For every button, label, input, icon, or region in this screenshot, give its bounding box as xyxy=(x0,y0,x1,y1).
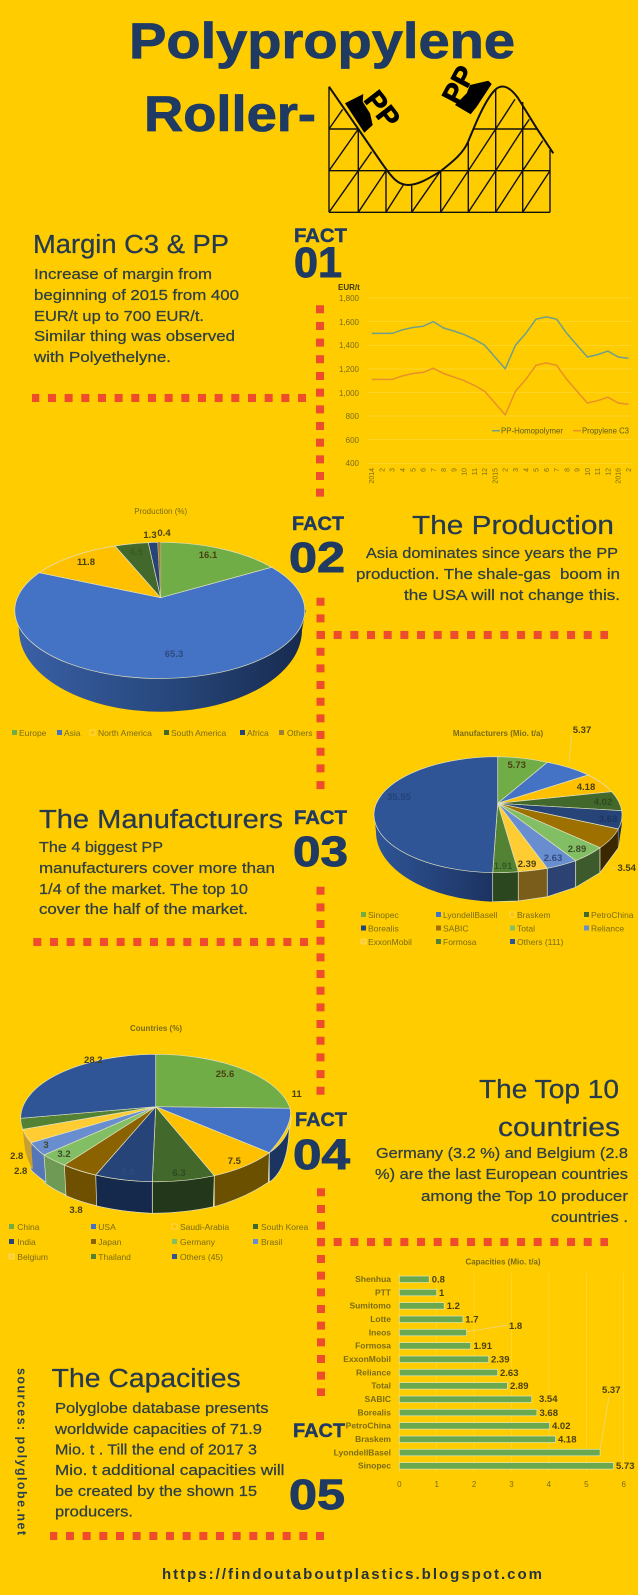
chart legend: production: Europe xyxy=(19,728,47,738)
text block: manufacturers: cover the half of the market. xyxy=(39,901,248,918)
line chart: margin: 9 xyxy=(575,468,582,472)
bar chart: capacities: 3.68 xyxy=(540,1408,558,1419)
chart legend: countries xyxy=(9,1222,309,1262)
chart legend: margin: PP-Homopolymer xyxy=(501,426,563,436)
bar chart: capacities: LyondellBasel xyxy=(334,1447,391,1457)
text block: production: Asia dominates since years the PP xyxy=(366,545,618,562)
bar chart: capacities: 4.02 xyxy=(552,1421,570,1432)
line chart: margin: 10 xyxy=(462,468,469,476)
pie chart: manufacturers: 1.91 xyxy=(494,861,513,872)
chart legend: manufacturers: Borealis xyxy=(368,924,399,934)
text block: margin: Increase of margin from xyxy=(34,266,212,283)
pie chart: manufacturers: 35.55 xyxy=(387,792,412,803)
bar chart: capacities: SABIC xyxy=(365,1394,391,1404)
decorative dashes xyxy=(32,305,608,1536)
line chart: margin: 400 xyxy=(346,459,360,468)
pie chart: countries: 25.6 xyxy=(216,1069,234,1080)
chart legend: manufacturers: ExxonMobil xyxy=(368,937,412,947)
bar chart: capacities: Ineos xyxy=(369,1327,391,1337)
text block: top 10 xyxy=(375,1145,628,1226)
line chart: margin: 10 xyxy=(585,468,592,476)
bar chart: capacities xyxy=(334,1258,634,1489)
chart legend: countries: Japan xyxy=(98,1237,122,1247)
bar chart: capacities: 2.63 xyxy=(500,1368,518,1379)
chart legend: manufacturers: Sinopec xyxy=(368,910,399,920)
chart legend: countries: China xyxy=(17,1222,40,1232)
text block: capacities: Mio. t . Till the end of 2017 3 xyxy=(55,1442,257,1458)
label: fact 02: 02 xyxy=(289,535,345,582)
line chart: margin: 2 xyxy=(503,468,510,472)
text block: margin: with Polyethelyne. xyxy=(33,349,171,366)
panel: fact 02 text xyxy=(356,512,620,604)
pie chart: manufacturers: 3.54 xyxy=(617,863,637,874)
text block: capacities: Polyglobe database presents xyxy=(55,1400,268,1417)
text block: top 10: %) are the last European countries xyxy=(375,1166,628,1183)
chart legend: countries: India xyxy=(17,1237,36,1247)
pie chart: countries: 2.8 xyxy=(14,1166,27,1177)
text block: manufacturers xyxy=(39,839,275,918)
pie chart: countries xyxy=(9,1024,309,1262)
chart legend: countries: Others (45) xyxy=(180,1252,223,1262)
text block: manufacturers: The 4 biggest PP xyxy=(39,839,163,856)
pie chart: manufacturers: 4.18 xyxy=(577,782,595,793)
bar chart: capacities: Lotte xyxy=(370,1314,391,1324)
text block: manufacturers: 1/4 of the market. The top 10 xyxy=(39,881,248,898)
pie chart: countries: 2.8 xyxy=(10,1151,23,1162)
line chart: margin: 12 xyxy=(482,468,489,476)
line chart: margin: 4 xyxy=(400,468,407,472)
chart legend: production: North America xyxy=(98,728,152,738)
line chart: margin: 7 xyxy=(431,468,438,472)
heading: capacities: The Capacities xyxy=(52,1365,241,1393)
bar chart: capacities: PTT xyxy=(375,1287,392,1297)
heading: margin: Margin C3 & PP xyxy=(33,231,229,259)
label: fact 01 xyxy=(294,225,347,287)
line chart: margin: 3 xyxy=(513,468,520,472)
text block: capacities: worldwide capacities of 71.9 xyxy=(54,1421,262,1438)
line chart: margin: 11 xyxy=(472,468,479,475)
label: fact 02 xyxy=(289,513,345,582)
pie chart: countries: 7.5 xyxy=(228,1156,242,1167)
line chart: margin: 8 xyxy=(441,468,448,472)
pie chart: countries: 3.8 xyxy=(69,1205,83,1216)
chart legend: production: Asia xyxy=(64,728,81,738)
text block: production: the USA will not change this. xyxy=(404,587,620,604)
icon: roller coaster: PP xyxy=(436,61,481,109)
line chart: margin: 6 xyxy=(420,468,428,472)
footer url: https://findoutaboutplastics.blogspot.com xyxy=(162,1566,542,1583)
bar chart: capacities: Reliance xyxy=(356,1367,391,1377)
label: fact 05: 05 xyxy=(289,1472,345,1519)
bar chart: capacities: 0 xyxy=(397,1480,402,1489)
label: fact 05 xyxy=(289,1420,345,1519)
icon: roller coaster xyxy=(329,61,553,212)
pie chart: manufacturers: Manufacturers (Mio. t/a) xyxy=(453,729,543,738)
line chart: margin: 1,600 xyxy=(339,318,360,327)
line chart: margin: 2016 xyxy=(616,468,623,484)
bar chart: capacities: 1 xyxy=(439,1288,445,1299)
text block: margin: Similar thing was observed xyxy=(34,328,235,345)
line chart: margin: 5 xyxy=(410,468,417,472)
line chart: margin: 1,200 xyxy=(339,365,360,374)
bar chart: capacities: 3 xyxy=(509,1480,514,1489)
bar chart: capacities: 1.8 xyxy=(509,1321,522,1332)
label: fact 03 xyxy=(293,807,348,876)
pie chart: production: 65.3 xyxy=(165,649,183,660)
chart legend: countries: Thailand xyxy=(98,1252,131,1262)
text block: capacities: Mio. t additional capacities will xyxy=(55,1462,284,1479)
bar chart: capacities: 5.37 xyxy=(602,1385,620,1396)
chart legend: manufacturers: PetroChina xyxy=(591,910,634,920)
bar chart: capacities: Sumitomo xyxy=(349,1301,391,1311)
panel: fact 04 text xyxy=(375,1076,628,1226)
label: fact 04: 04 xyxy=(293,1132,350,1179)
line chart: margin: 1,400 xyxy=(339,341,360,350)
pie chart: production: 0.4 xyxy=(157,528,171,539)
text block: production: production. The shale-gas boom in xyxy=(356,566,620,583)
heading: top 10 xyxy=(479,1076,620,1142)
pie chart: manufacturers: 5.73 xyxy=(507,760,526,771)
line chart: margin: 5 xyxy=(534,468,540,472)
panel: fact 03 text xyxy=(39,806,283,918)
bar chart: capacities: 1.2 xyxy=(447,1301,460,1312)
text block: manufacturers: manufacturers cover more than xyxy=(39,860,275,877)
line chart: margin: 2 xyxy=(626,468,633,472)
text block: capacities: be created by the shown 15 xyxy=(55,1483,257,1500)
sources note: sources: polyglobe.net xyxy=(14,1368,28,1536)
bar chart: capacities: 2.39 xyxy=(491,1354,510,1366)
pie chart: production: 1.3 xyxy=(143,530,157,541)
bar chart: capacities: 1 xyxy=(434,1480,439,1489)
panel: fact 01 text xyxy=(33,231,239,366)
line chart: margin: 600 xyxy=(346,436,360,445)
chart legend: countries: South Korea xyxy=(261,1222,309,1232)
pie chart: countries: 6.3 xyxy=(172,1168,186,1179)
label: fact 01: 01 xyxy=(294,240,342,287)
title: Roller- xyxy=(144,86,316,142)
chart legend: countries: Belgium xyxy=(17,1252,48,1262)
bar chart: capacities: Total xyxy=(371,1381,391,1391)
bar chart: capacities: 0.8 xyxy=(432,1274,445,1286)
pie chart: countries: 3.2 xyxy=(57,1149,71,1160)
title xyxy=(129,13,515,142)
bar chart: capacities: Borealis xyxy=(357,1407,391,1417)
text block: production xyxy=(356,545,620,604)
pie chart: countries: 28.2 xyxy=(84,1055,103,1066)
panel: fact 05 text xyxy=(52,1365,285,1520)
bar chart: capacities: 6 xyxy=(621,1480,626,1489)
line chart: margin: 7 xyxy=(554,468,561,472)
text block: margin xyxy=(33,266,239,366)
bar chart: capacities: 2.89 xyxy=(510,1381,528,1392)
chart legend: manufacturers xyxy=(361,910,634,947)
line chart: margin: 4 xyxy=(523,468,530,472)
bar chart: capacities: 2 xyxy=(472,1480,477,1489)
pie chart: manufacturers xyxy=(361,725,637,947)
icon: roller coaster: PP xyxy=(358,85,406,134)
label: fact 01: FACT xyxy=(294,225,347,247)
pie chart: manufacturers: 4.02 xyxy=(594,797,612,808)
chart legend: countries: Germany xyxy=(180,1237,216,1247)
line chart: margin: 1,000 xyxy=(339,389,360,398)
bar chart: capacities: Braskem xyxy=(355,1434,391,1444)
chart legend: countries: USA xyxy=(98,1222,116,1232)
pie chart: manufacturers: 2.63 xyxy=(544,853,562,864)
chart legend: production xyxy=(12,728,313,738)
chart legend: production: South America xyxy=(171,728,227,738)
line chart: margin: 6 xyxy=(544,468,551,472)
line chart: margin: EUR/t xyxy=(338,283,360,292)
pie chart: production: 4.5 xyxy=(129,547,143,558)
pie chart: production: 11.8 xyxy=(77,557,95,568)
label: fact 03: FACT xyxy=(294,807,347,829)
heading: top 10: The Top 10 xyxy=(479,1076,619,1104)
chart legend: manufacturers: Reliance xyxy=(591,924,624,934)
pie chart: manufacturers: 2.39 xyxy=(518,859,536,870)
label: fact 03: 03 xyxy=(293,829,348,876)
line chart: margin xyxy=(338,283,633,484)
bar chart: capacities: Formosa xyxy=(355,1341,391,1351)
pie chart: manufacturers: 3.68 xyxy=(599,814,617,825)
chart legend: countries: Saudi-Arabia xyxy=(180,1222,229,1232)
chart legend: manufacturers: LyondellBasell xyxy=(443,910,498,920)
line chart: margin: 9 xyxy=(451,468,458,472)
text block: capacities xyxy=(54,1400,285,1520)
pie chart: production xyxy=(12,507,313,738)
pie chart: countries: 3 xyxy=(43,1140,49,1151)
pie chart: manufacturers: 5.37 xyxy=(573,725,591,736)
chart legend: manufacturers: Formosa xyxy=(443,937,477,947)
bar chart: capacities: Shenhua xyxy=(355,1274,391,1284)
chart legend: production: Others xyxy=(287,728,313,738)
label: fact 02: FACT xyxy=(292,513,344,535)
label: fact 04: FACT xyxy=(295,1109,347,1131)
chart legend: production: Africa xyxy=(247,728,269,738)
bar chart: capacities: Capacities (Mio. t/a) xyxy=(465,1258,541,1266)
pie chart: production: 16.1 xyxy=(199,550,218,561)
chart legend: manufacturers: Braskem xyxy=(517,910,551,920)
text block: top 10: among the Top 10 producer xyxy=(421,1188,628,1205)
bar chart: capacities: 4.18 xyxy=(558,1434,576,1446)
line chart: margin: 11 xyxy=(595,468,602,475)
text block: top 10: Germany (3.2 %) and Belgium (2.8 xyxy=(376,1145,628,1162)
bar chart: capacities: 4 xyxy=(547,1480,552,1489)
bar chart: capacities: ExxonMobil xyxy=(343,1354,391,1364)
chart legend: margin: Propylene C3 xyxy=(582,426,630,436)
pie chart: countries: Countries (%) xyxy=(130,1024,182,1033)
title: Polypropylene xyxy=(129,13,515,69)
chart legend: manufacturers: Others (111) xyxy=(517,937,564,947)
bar chart: capacities: 5 xyxy=(584,1480,589,1489)
pie chart: production: Production (%) xyxy=(134,507,187,516)
chart legend: countries: Brasil xyxy=(261,1237,282,1247)
line chart: margin: 8 xyxy=(564,468,571,472)
bar chart: capacities: 3.54 xyxy=(539,1394,558,1405)
bar chart: capacities: PetroChina xyxy=(346,1421,391,1431)
line chart: margin: 2015 xyxy=(492,468,499,484)
label: fact 05: FACT xyxy=(293,1420,345,1442)
line chart: margin: 1,800 xyxy=(339,294,360,303)
pie chart: countries: 11 xyxy=(292,1089,302,1100)
bar chart: capacities: 5.73 xyxy=(616,1461,634,1472)
line chart: margin: 2014 xyxy=(369,468,376,484)
chart legend: manufacturers: SABIC xyxy=(443,924,469,934)
chart legend: margin xyxy=(492,426,630,436)
pie chart: countries: 5.8 xyxy=(121,1167,135,1178)
text block: margin: EUR/t up to 700 EUR/t. xyxy=(34,308,204,325)
bar chart: capacities: Sinopec xyxy=(358,1461,391,1471)
heading: top 10: countries xyxy=(498,1114,620,1142)
line chart: margin: 800 xyxy=(346,412,360,421)
heading: manufacturers: The Manufacturers xyxy=(39,806,283,834)
text block: margin: beginning of 2015 from 400 xyxy=(34,287,239,304)
label: fact 04 xyxy=(293,1109,350,1179)
text block: top 10: countries . xyxy=(551,1209,628,1226)
line chart: margin: 3 xyxy=(390,468,397,472)
pie chart: manufacturers: 2.89 xyxy=(568,844,586,855)
text block: capacities: producers. xyxy=(55,1504,133,1520)
bar chart: capacities: 1.7 xyxy=(465,1314,479,1326)
line chart: margin: 2 xyxy=(380,468,386,472)
bar chart: capacities: 1.91 xyxy=(474,1341,493,1352)
chart legend: manufacturers: Total xyxy=(517,924,535,934)
line chart: margin: 12 xyxy=(605,468,612,476)
heading: production: The Production xyxy=(412,512,614,540)
